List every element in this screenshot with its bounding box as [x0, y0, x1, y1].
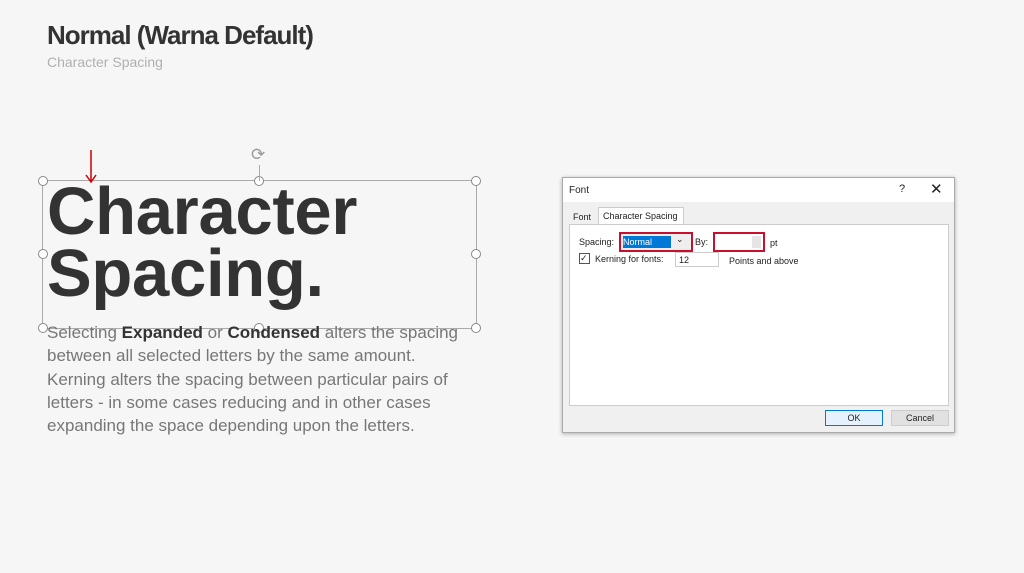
icon: rotate handle: ⟳ — [251, 145, 265, 164]
selection box — [42, 180, 477, 329]
panel: font dialog — [562, 177, 955, 433]
panel: font dialog: Font — [573, 212, 591, 222]
body text: between all selected letters by the same amount. — [47, 346, 416, 365]
heading: Character Spacing.: Character — [47, 174, 357, 249]
panel: font dialog: ? — [899, 183, 905, 195]
subtitle: Character Spacing — [47, 54, 163, 70]
body text: expanding the space depending upon the letters. — [47, 416, 415, 435]
heading: Character Spacing.: Spacing. — [47, 236, 324, 311]
panel: font dialog: ⌄ — [676, 234, 684, 244]
heading: Character Spacing. — [47, 174, 357, 311]
panel: font dialog: Normal — [623, 237, 652, 247]
arrow: red down arrow — [85, 150, 97, 184]
panel: font dialog: OK — [847, 413, 860, 423]
body text: Kerning alters the spacing between particular pairs of — [47, 370, 448, 389]
panel: font dialog: Character Spacing — [603, 211, 678, 221]
title: Normal (Warna Default) — [47, 20, 313, 50]
panel: font dialog: ✕ — [930, 181, 943, 198]
panel: font dialog: 12 — [679, 255, 689, 265]
panel: font dialog: ✓ — [580, 253, 588, 263]
panel: font dialog: Spacing: — [579, 237, 614, 247]
panel: font dialog: By: — [695, 237, 708, 247]
panel: font dialog: Font — [569, 185, 589, 196]
body text — [47, 323, 458, 435]
body text: letters - in some cases reducing and in other cases — [47, 393, 431, 412]
panel: font dialog: Kerning for fonts: — [595, 254, 664, 264]
panel: font dialog: Cancel — [906, 413, 934, 423]
panel: font dialog: pt — [770, 238, 778, 248]
panel: font dialog: Points and above — [729, 256, 799, 266]
body text: Selecting Expanded or Condensed alters the spacing — [47, 323, 458, 342]
